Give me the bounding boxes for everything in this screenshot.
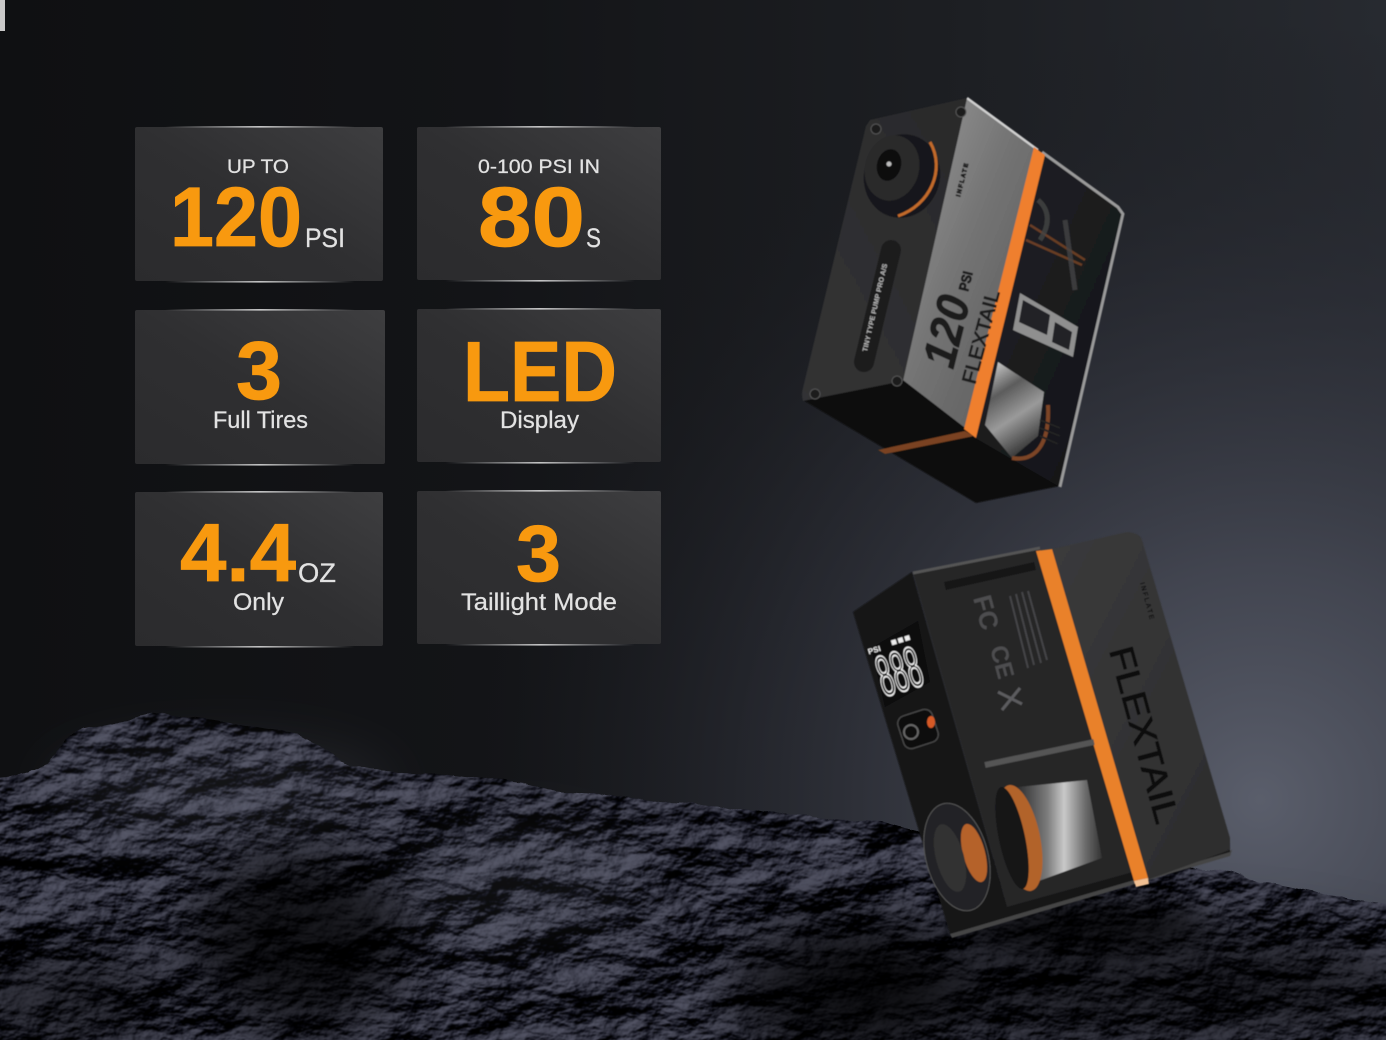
pump screws — [810, 107, 966, 399]
product: upper flextail pump — [802, 98, 1123, 503]
pump divider bar — [985, 742, 1094, 765]
pump dark front plate — [802, 98, 967, 401]
panel: 4.4 oz only — [135, 491, 383, 648]
panel: 0-100 psi in 80 s: S — [586, 223, 601, 253]
panel: 3 taillight mode: Taillight Mode — [461, 589, 617, 616]
product: lower flextail pump — [853, 532, 1232, 938]
panel: 3 taillight mode: 3 — [516, 509, 561, 598]
panel: up to 120 psi: PSI — [305, 223, 345, 253]
panel: up to 120 psi: 120 — [170, 170, 302, 264]
pump led display: PSI — [867, 644, 882, 656]
pump orange band — [964, 147, 1045, 438]
pump pill badge: TINY TYPE PUMP PRO A/S — [862, 263, 889, 352]
pump top highlight — [967, 98, 1038, 150]
panel: 4.4 oz only: 4.4 — [180, 506, 296, 599]
pump fine print — [1010, 591, 1047, 668]
panel: 4.4 oz only: Only — [233, 589, 284, 616]
pump bottom rim — [950, 850, 1232, 938]
pump gear wheel — [913, 796, 1001, 918]
pump bottom orange band highlight — [1134, 878, 1149, 887]
pump transparent side — [972, 152, 1123, 487]
pump printed text: INFLATE — [956, 163, 970, 197]
pump printed text: PSI — [955, 269, 976, 293]
panel: 3 full tires — [135, 309, 385, 466]
pump orange band — [1036, 549, 1148, 881]
pump valve knob — [854, 126, 950, 226]
pump grey side face — [903, 98, 1038, 434]
panel: up to 120 psi — [135, 126, 383, 283]
panel: led display — [417, 308, 661, 464]
pump bottom orange trim — [878, 431, 974, 454]
pump motor — [985, 362, 1060, 459]
pump bottom face — [803, 380, 1060, 503]
pump motor — [988, 780, 1102, 895]
pump certification marks: FC — [967, 592, 1005, 633]
pump printed text: 120 — [912, 290, 980, 372]
panel: 4.4 oz only: OZ — [298, 558, 336, 588]
pump button and indicator — [896, 707, 940, 751]
panel: led display: Display — [500, 407, 579, 434]
rock landscape — [0, 708, 1386, 1040]
pump printed text — [912, 163, 1005, 386]
pump grey body — [1048, 532, 1230, 880]
panel: 0-100 psi in 80 s: 80 — [478, 170, 585, 264]
pump certification marks — [967, 592, 1022, 710]
panel: 3 taillight mode — [417, 490, 661, 646]
pump glass top face — [913, 548, 1135, 907]
panel: 3 full tires: 3 — [236, 324, 282, 417]
pump certification marks: CE — [984, 643, 1019, 682]
pump inflate logo: INFLATE — [1138, 582, 1155, 621]
corner mark top left — [0, 0, 5, 31]
pump printed brand: FLEXTAIL — [1101, 642, 1186, 828]
panel: 0-100 psi in 80 s: 0-100 PSI IN — [478, 156, 600, 178]
panel: led display: LED — [463, 325, 617, 420]
panel: 3 full tires: Full Tires — [213, 407, 308, 434]
pump printed text: FLEXTAIL — [959, 288, 1005, 386]
pump led display — [867, 621, 930, 710]
panel: 0-100 psi in 80 s — [417, 126, 661, 282]
pump led display: 888 — [869, 634, 930, 709]
panel: up to 120 psi: UP TO — [227, 156, 289, 178]
rock shading — [0, 745, 1386, 1040]
pump shadowed transparent front — [853, 572, 1007, 934]
